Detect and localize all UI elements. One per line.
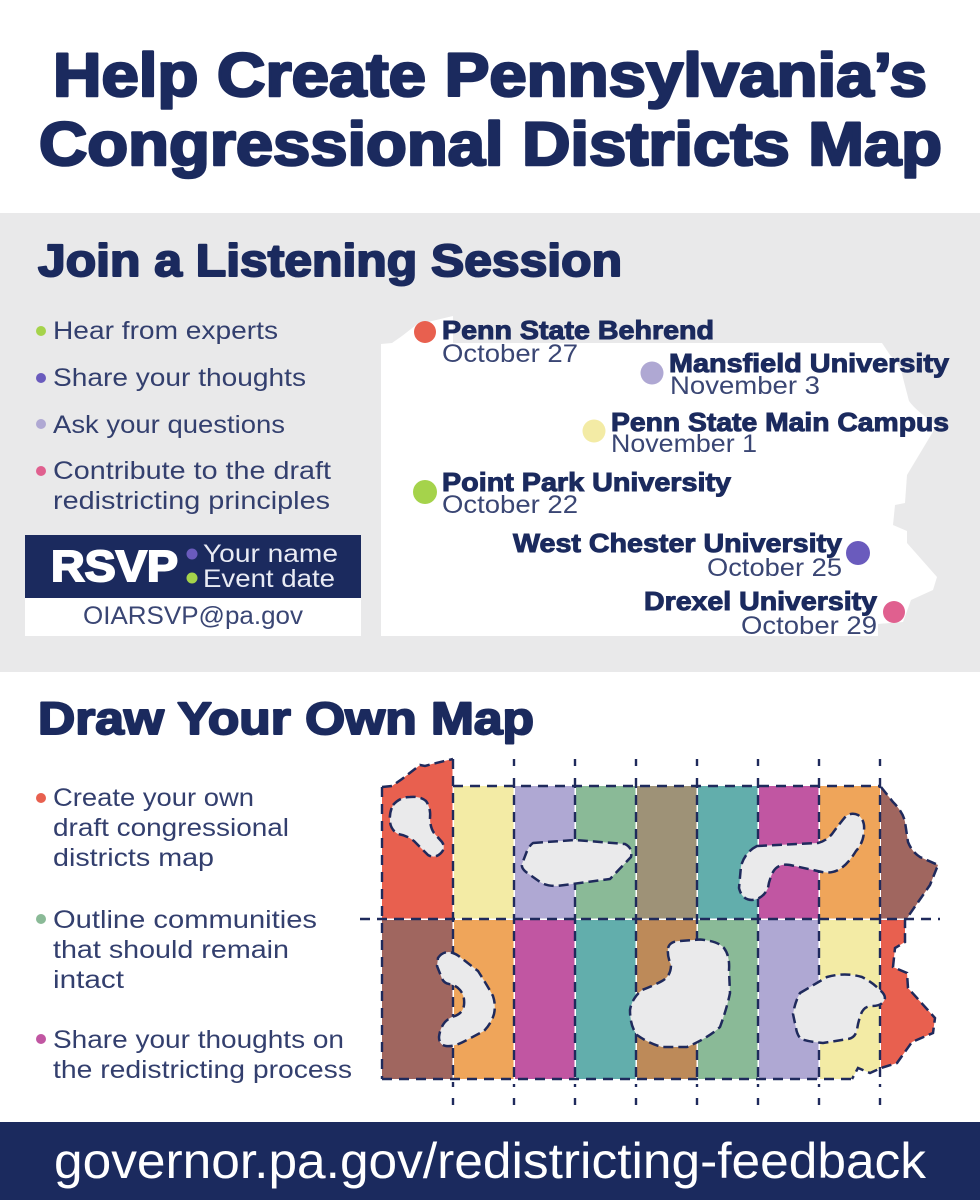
location: penn state behrend: October 27 bbox=[442, 340, 578, 368]
footer: url banner: governor.pa.gov/redistricting-feedback bbox=[54, 1133, 927, 1189]
location: point park university bbox=[413, 467, 732, 519]
location: west chester university: October 25 bbox=[707, 554, 842, 582]
list: draw your own map bullets: the redistricting process bbox=[53, 1056, 352, 1084]
callout: rsvp box: Your name bbox=[203, 540, 338, 568]
list: session bullets: redistricting principles bbox=[53, 487, 330, 515]
heading: join a listening session: Join a Listening Session bbox=[38, 235, 622, 286]
location: penn state main campus: November 1 bbox=[611, 430, 757, 458]
location: west chester university: West Chester University bbox=[513, 528, 843, 558]
list: session bullets: Ask your questions bbox=[53, 411, 285, 439]
panel: join a listening session bbox=[0, 213, 980, 672]
list: draw your own map bullets: that should remain bbox=[53, 936, 289, 964]
location: penn state behrend bbox=[414, 315, 714, 368]
map: districts grid bbox=[360, 759, 940, 1105]
map: pennsylvania session locations bbox=[381, 315, 950, 640]
list: draw your own map bullets: districts map bbox=[53, 844, 214, 872]
list: session bullets: Share your thoughts bbox=[53, 364, 306, 392]
location: mansfield university: November 3 bbox=[670, 372, 820, 400]
location: drexel university bbox=[644, 586, 905, 640]
callout: rsvp box: OIARSVP@pa.gov bbox=[83, 602, 304, 630]
location: penn state behrend: Penn State Behrend bbox=[442, 315, 714, 345]
location: mansfield university bbox=[640, 348, 950, 400]
title bbox=[39, 41, 942, 178]
location: mansfield university: Mansfield University bbox=[669, 348, 950, 378]
location: drexel university: October 29 bbox=[741, 612, 877, 640]
callout: rsvp box bbox=[25, 535, 361, 636]
list: session bullets bbox=[36, 317, 331, 515]
location: penn state main campus bbox=[582, 407, 949, 458]
list: draw your own map bullets: Create your own bbox=[53, 784, 254, 812]
location: point park university: October 22 bbox=[442, 491, 578, 519]
list: draw your own map bullets: intact bbox=[53, 966, 124, 994]
title: Help Create Pennsylvania’s bbox=[53, 41, 927, 109]
list: session bullets: Hear from experts bbox=[53, 317, 278, 345]
callout: rsvp box: RSVP bbox=[51, 542, 178, 591]
list: session bullets: Contribute to the draft bbox=[53, 457, 331, 485]
location: point park university: Point Park University bbox=[442, 467, 732, 497]
callout: rsvp box: Event date bbox=[203, 565, 335, 593]
list: draw your own map bullets: Outline communities bbox=[53, 906, 317, 934]
heading: draw your own map: Draw Your Own Map bbox=[38, 693, 534, 744]
location: west chester university bbox=[513, 528, 870, 582]
district cells bbox=[382, 759, 938, 1079]
list: draw your own map bullets: draft congressional bbox=[53, 814, 289, 842]
title: Congressional Districts Map bbox=[39, 110, 942, 178]
footer: url banner bbox=[0, 1122, 980, 1200]
location: penn state main campus: Penn State Main Campus bbox=[611, 407, 949, 437]
list: draw your own map bullets: Share your thoughts on bbox=[53, 1026, 344, 1054]
location: drexel university: Drexel University bbox=[644, 586, 878, 616]
community blobs bbox=[390, 797, 885, 1047]
list: draw your own map bullets bbox=[36, 784, 352, 1084]
